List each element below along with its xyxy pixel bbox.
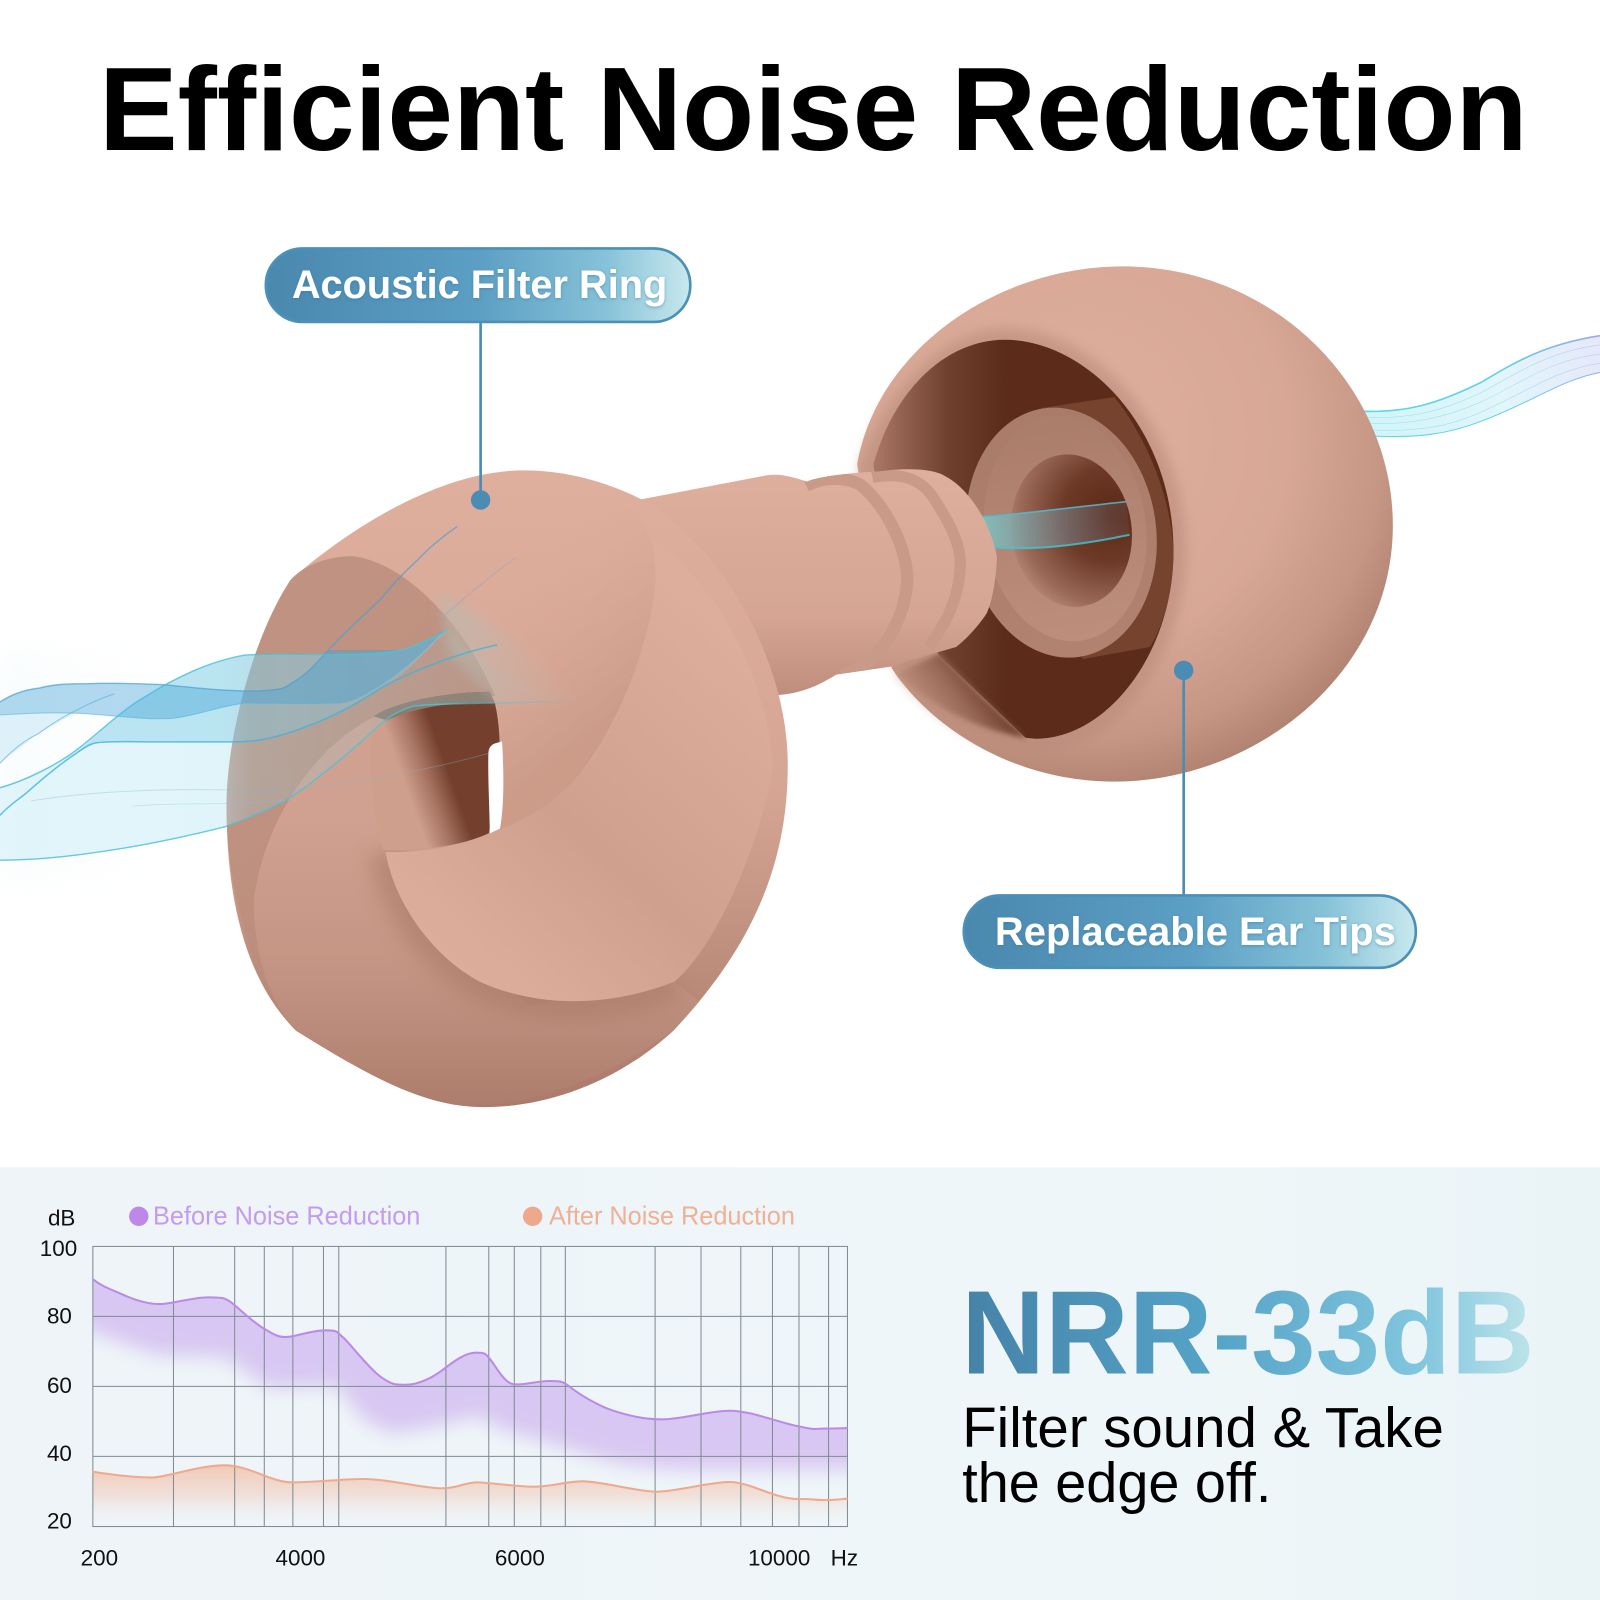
ring lower lobe — [256, 850, 700, 1106]
rating description: the edge off. — [962, 1451, 1271, 1514]
axis labels — [40, 1206, 858, 1570]
hole upper lip — [373, 692, 495, 720]
central bore — [1001, 446, 1142, 615]
axis labels: dB — [48, 1206, 75, 1231]
ear tip — [857, 266, 1393, 782]
callout: acoustic filter ring — [266, 248, 690, 510]
right sound wave — [1357, 336, 1600, 437]
leader line — [1182, 670, 1185, 896]
rib two — [872, 476, 960, 647]
chart legend — [129, 1202, 795, 1230]
inner flange step — [970, 405, 1161, 652]
axis labels: 80 — [47, 1303, 72, 1328]
before line — [93, 1279, 848, 1429]
after line — [93, 1465, 848, 1500]
axis labels: 4000 — [276, 1545, 325, 1570]
wave strands — [0, 527, 586, 860]
axis labels: 200 — [81, 1545, 118, 1570]
see-through slit — [488, 741, 503, 833]
leader line — [479, 322, 482, 500]
after area — [93, 1465, 848, 1527]
left sound wave — [0, 527, 586, 860]
center sound wave in bore — [980, 502, 1130, 548]
background glow behind sound wave — [0, 653, 204, 878]
inner tube — [1041, 397, 1173, 659]
axis labels: 60 — [47, 1373, 72, 1398]
lobe shadow near swirl edge — [386, 852, 674, 1001]
pill label: Replaceable Ear Tips — [995, 909, 1396, 954]
axis labels: 10000 — [748, 1545, 810, 1570]
grid — [93, 1246, 847, 1527]
NRR rating: NRR-33dB — [961, 1267, 1535, 1399]
cavity lower lip — [898, 653, 1027, 738]
chart legend: Before Noise Reduction — [153, 1202, 420, 1230]
title: Efficient Noise Reduction — [99, 44, 1528, 176]
ear plug illustration — [227, 266, 1393, 1107]
flange ring — [950, 395, 1173, 670]
axis labels: 40 — [47, 1441, 72, 1466]
wave blue band — [0, 630, 444, 719]
ring base — [227, 470, 788, 1107]
pill label: Acoustic Filter Ring — [292, 262, 667, 307]
before area — [71, 1265, 878, 1469]
tip outer shell — [857, 266, 1393, 782]
rating description — [962, 1396, 1444, 1514]
filter ring body — [227, 470, 788, 1107]
pill — [266, 248, 690, 322]
stem with ribs — [638, 469, 997, 714]
leader dot — [471, 490, 490, 510]
legend: before — [129, 1207, 148, 1226]
axis labels: 6000 — [495, 1545, 545, 1570]
ring left cut face — [227, 556, 495, 1036]
ring upper hood — [405, 500, 656, 833]
axis labels: Hz — [831, 1545, 858, 1570]
tip cavity — [873, 340, 1173, 739]
rib one — [806, 479, 907, 676]
pill — [964, 895, 1416, 968]
chart — [40, 1206, 878, 1570]
wave lower mesh band — [0, 630, 586, 860]
legend: after — [523, 1207, 542, 1226]
chart legend: After Noise Reduction — [549, 1202, 795, 1230]
wave middle band — [77, 630, 448, 753]
wave left light patch — [0, 712, 77, 763]
haze over hood — [440, 593, 573, 703]
leader dot — [1174, 661, 1193, 680]
ring hole — [371, 692, 500, 850]
axis labels: 100 — [40, 1236, 77, 1261]
axis labels: 20 — [47, 1509, 72, 1534]
rating description: Filter sound & Take — [962, 1396, 1444, 1459]
ring light swirl — [386, 541, 773, 1001]
panel: noise chart and rating — [0, 1167, 1600, 1600]
tip inner rim — [859, 329, 1186, 753]
callout: replaceable ear tips — [964, 661, 1416, 968]
